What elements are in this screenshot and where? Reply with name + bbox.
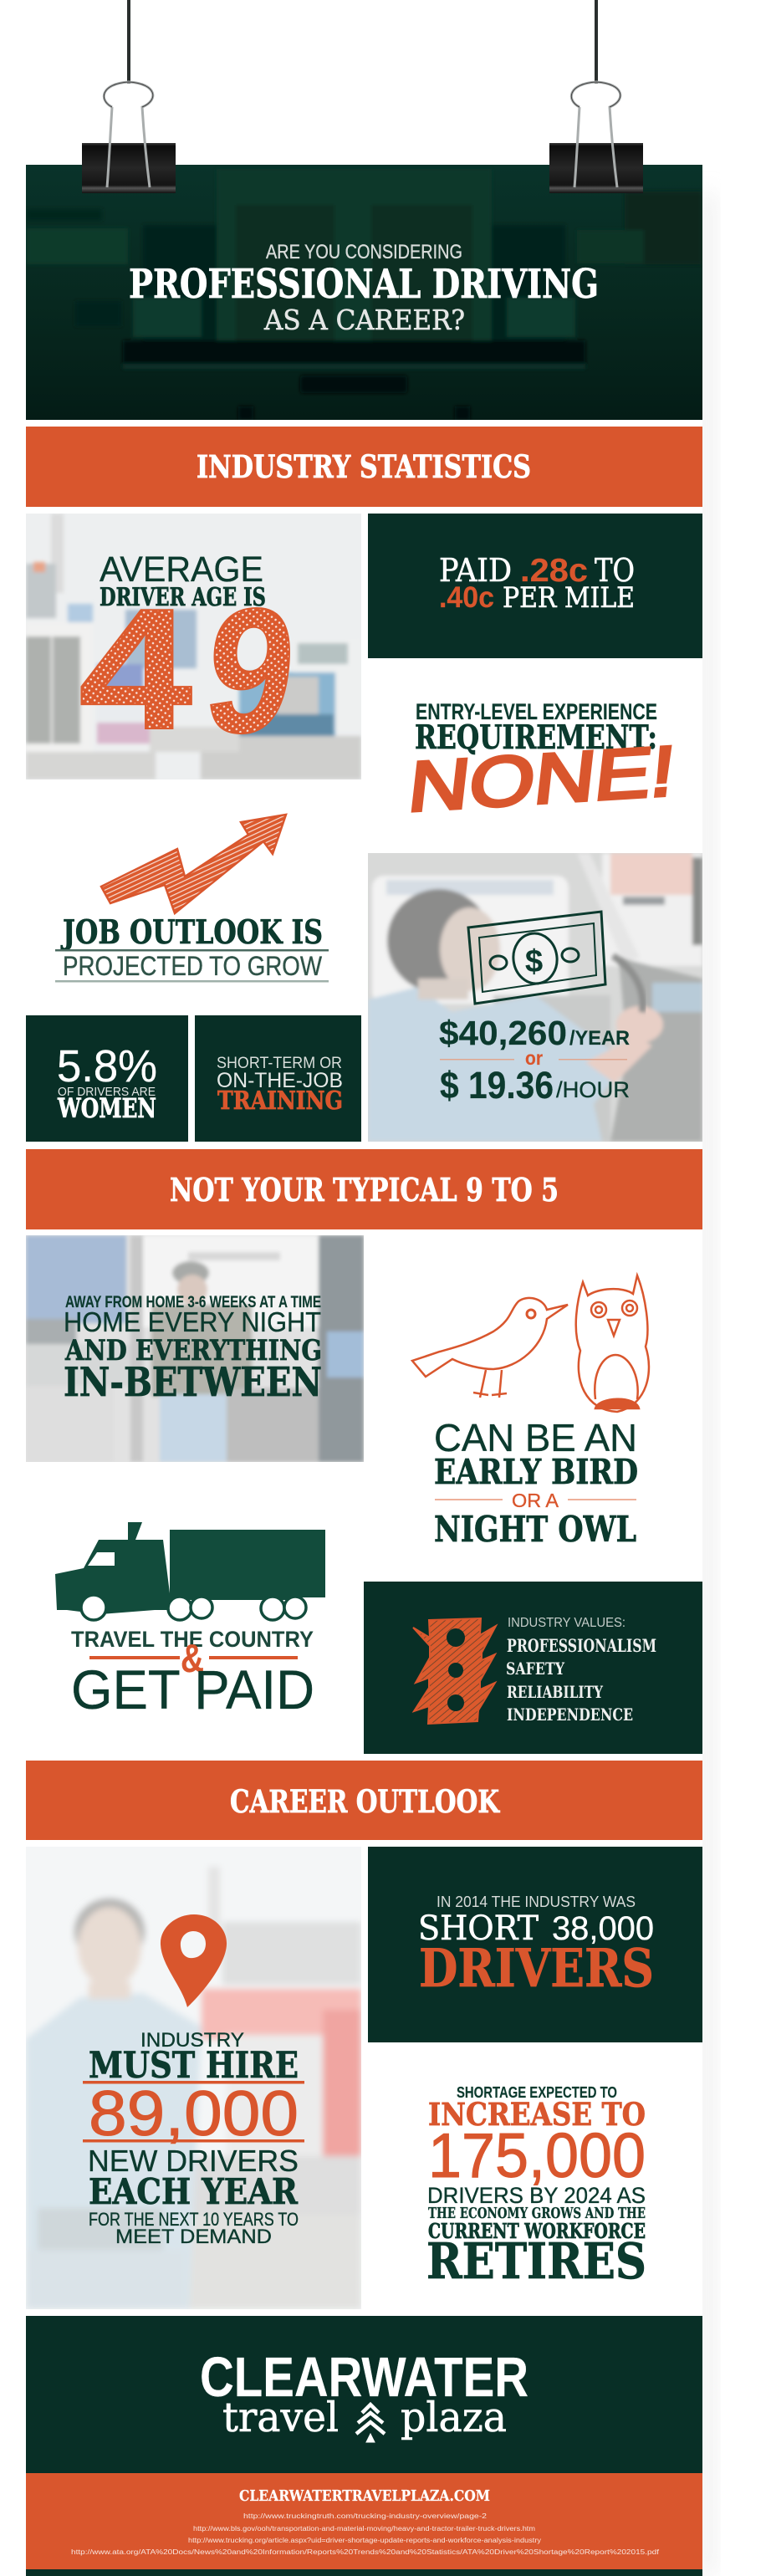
each year: EACH YEAR	[89, 2171, 299, 2212]
source lines: http://www.truckingtruth.com/trucking-industry-overview/page-2	[243, 2512, 488, 2520]
panel: short 38,000 drivers: DRIVERS	[419, 1937, 654, 1999]
panel: training: TRAINING	[217, 1086, 343, 1116]
icon: dollar bill	[468, 912, 605, 1004]
panel: women drivers	[26, 1015, 188, 1142]
driver age is: DRIVER AGE IS	[100, 583, 266, 612]
panel: salary: /YEAR	[569, 1027, 630, 1050]
panel: women drivers: OF DRIVERS ARE	[58, 1085, 156, 1099]
panel: women drivers: WOMEN	[57, 1092, 156, 1124]
average: AVERAGE	[100, 549, 263, 590]
panel: paid per mile: TO	[595, 552, 635, 589]
banner: not your typical 9 to 5	[26, 1149, 702, 1229]
new drivers: NEW DRIVERS	[88, 2144, 299, 2178]
panel: travel the country	[55, 1522, 325, 1720]
panel: shortage expected: 175,000	[428, 2120, 646, 2190]
in-between: IN-BETWEEN	[64, 1359, 322, 1406]
source lines	[71, 2512, 660, 2556]
values heading: INDUSTRY VALUES:	[508, 1616, 625, 1630]
panel: paid per mile	[368, 514, 702, 658]
big number 49: 4	[79, 573, 192, 765]
photo: parked trucks	[26, 514, 361, 779]
panel: short 38,000 drivers	[368, 1847, 702, 2042]
panel: salary	[368, 853, 702, 1142]
meet demand: MEET DEMAND	[115, 2226, 272, 2248]
source lines: http://www.bls.gov/ooh/transportation-and-material-moving/heavy-and-tractor-trailer-truck-drivers.htm	[193, 2525, 535, 2533]
panel: must hire	[26, 1847, 361, 2309]
away from home line: AWAY FROM HOME 3-6 WEEKS AT A TIME	[65, 1294, 321, 1311]
header truck photo	[27, 169, 702, 420]
early bird: EARLY BIRD	[434, 1452, 638, 1492]
values list: PROFESSIONALISM	[507, 1635, 656, 1656]
panel: training: SHORT-TERM OR	[217, 1055, 342, 1072]
panel: short 38,000 drivers: IN 2014 THE INDUSTRY WAS	[437, 1894, 636, 1910]
icon: map pin	[161, 1914, 227, 2007]
89,000: 89,000	[89, 2078, 299, 2149]
panel: short 38,000 drivers: SHORT	[418, 1909, 539, 1948]
ampersand: &	[181, 1636, 204, 1680]
panel: shortage expected: INCREASE TO	[428, 2096, 646, 2133]
left string	[127, 0, 130, 84]
panel: paid per mile: PAID	[439, 552, 512, 589]
panel: footer sources: CLEARWATERTRAVELPLAZA.COM	[239, 2487, 490, 2505]
photo: driver in cab	[368, 853, 702, 1142]
values list: SAFETY	[506, 1659, 565, 1679]
or divider: or	[525, 1047, 543, 1069]
projected to grow: PROJECTED TO GROW	[63, 951, 323, 981]
panel: paid per mile: .28c	[520, 553, 588, 589]
icon: bird	[412, 1298, 568, 1398]
binder clip right	[549, 82, 643, 193]
photo: driver at fuel pump	[26, 1235, 364, 1462]
big number 49: 9	[197, 573, 304, 770]
values list: RELIABILITY	[507, 1682, 604, 1702]
icon: traffic light	[413, 1618, 496, 1724]
right string	[595, 0, 598, 84]
home every night: HOME EVERY NIGHT	[64, 1306, 321, 1337]
panel: shortage expected	[426, 2084, 646, 2290]
panel: entry-level requirement: REQUIREMENT:	[415, 718, 657, 757]
night owl: NIGHT OWL	[434, 1509, 636, 1550]
panel: job outlook	[55, 815, 329, 982]
panel: shortage expected: RETIRES	[426, 2232, 646, 2290]
panel: home every night	[26, 1235, 364, 1462]
icon: owl	[576, 1275, 649, 1412]
travel the country text: TRAVEL THE COUNTRY	[71, 1627, 314, 1652]
panel: clearwater logo: plaza	[401, 2394, 507, 2441]
job outlook is: JOB OUTLOOK IS	[60, 913, 323, 952]
binder clip left	[82, 82, 176, 193]
panel: shortage expected: DRIVERS BY 2024 AS	[427, 2183, 646, 2208]
must hire: MUST HIRE	[89, 2045, 299, 2087]
panel: entry-level requirement: ENTRY-LEVEL EXPERIENCE	[416, 699, 657, 724]
panel: clearwater logo: CLEARWATER	[200, 2346, 528, 2409]
dollar sign: $	[525, 944, 543, 979]
panel: paid per mile: .40c	[439, 581, 494, 614]
source lines: http://www.trucking.org/article.aspx?uid=driver-shortage-update-reports-and-workforce-analysis-industry	[188, 2537, 541, 2544]
panel: shortage expected: SHORTAGE EXPECTED TO	[457, 2084, 617, 2101]
photo: driver and red truck	[26, 1847, 361, 2309]
none hand-lettered: NONE!	[405, 730, 679, 826]
and everything: AND EVERYTHING	[64, 1334, 322, 1367]
panel: early bird or night owl	[412, 1275, 649, 1550]
values list	[506, 1635, 656, 1725]
values list: INDEPENDENCE	[507, 1705, 633, 1725]
industry: INDUSTRY	[140, 2029, 244, 2052]
panel: women drivers: 5.8%	[57, 1041, 157, 1091]
header small line: ARE YOU CONSIDERING	[266, 241, 462, 263]
banner: industry statistics: INDUSTRY STATISTICS	[197, 448, 531, 485]
panel: paid per mile: PER MILE	[503, 581, 635, 615]
panel: training	[195, 1015, 361, 1142]
get paid: GET PAID	[71, 1659, 314, 1720]
panel: clearwater logo: travel	[222, 2394, 339, 2441]
banner: industry statistics	[26, 427, 702, 507]
yearly pay: $40,260	[439, 1014, 567, 1052]
header panel	[26, 165, 702, 420]
source lines: http://www.ata.org/ATA%20Docs/News%20and%20Information/Reports%20Trends%20and%20Statistics/ATA%20Driver%20Shortage%20Report%202015.pdf	[71, 2548, 660, 2556]
banner: career outlook: CAREER OUTLOOK	[230, 1783, 500, 1820]
panel: industry values	[364, 1582, 702, 1754]
panel: shortage expected: CURRENT WORKFORCE	[428, 2219, 646, 2243]
panel: footer sources	[26, 2473, 702, 2569]
panel: entry-level requirement	[405, 699, 679, 826]
panel: salary: /HOUR	[556, 1077, 630, 1102]
next 10 years: FOR THE NEXT 10 YEARS TO	[89, 2209, 299, 2230]
panel: average driver age	[26, 514, 361, 779]
header main title: PROFESSIONAL DRIVING	[129, 261, 599, 308]
big number 49	[79, 573, 304, 770]
banner: not your typical 9 to 5: NOT YOUR TYPICAL 9 TO 5	[170, 1171, 559, 1209]
panel: training: ON-THE-JOB	[217, 1069, 343, 1092]
icon: rising arrow	[101, 815, 286, 913]
icon: semi truck	[55, 1522, 325, 1620]
panel: shortage expected: THE ECONOMY GROWS AND THE	[428, 2205, 646, 2222]
hourly pay: $ 19.36	[440, 1064, 554, 1107]
panel: short 38,000 drivers: 38,000	[552, 1910, 654, 1947]
panel: clearwater logo	[26, 2316, 702, 2473]
icon: tree chevrons	[356, 2405, 385, 2442]
can be an: CAN BE AN	[434, 1416, 637, 1459]
bottom strip	[26, 2569, 702, 2576]
banner: career outlook	[26, 1761, 702, 1840]
header sub line: AS A CAREER?	[263, 304, 465, 336]
or a: OR A	[512, 1490, 559, 1511]
